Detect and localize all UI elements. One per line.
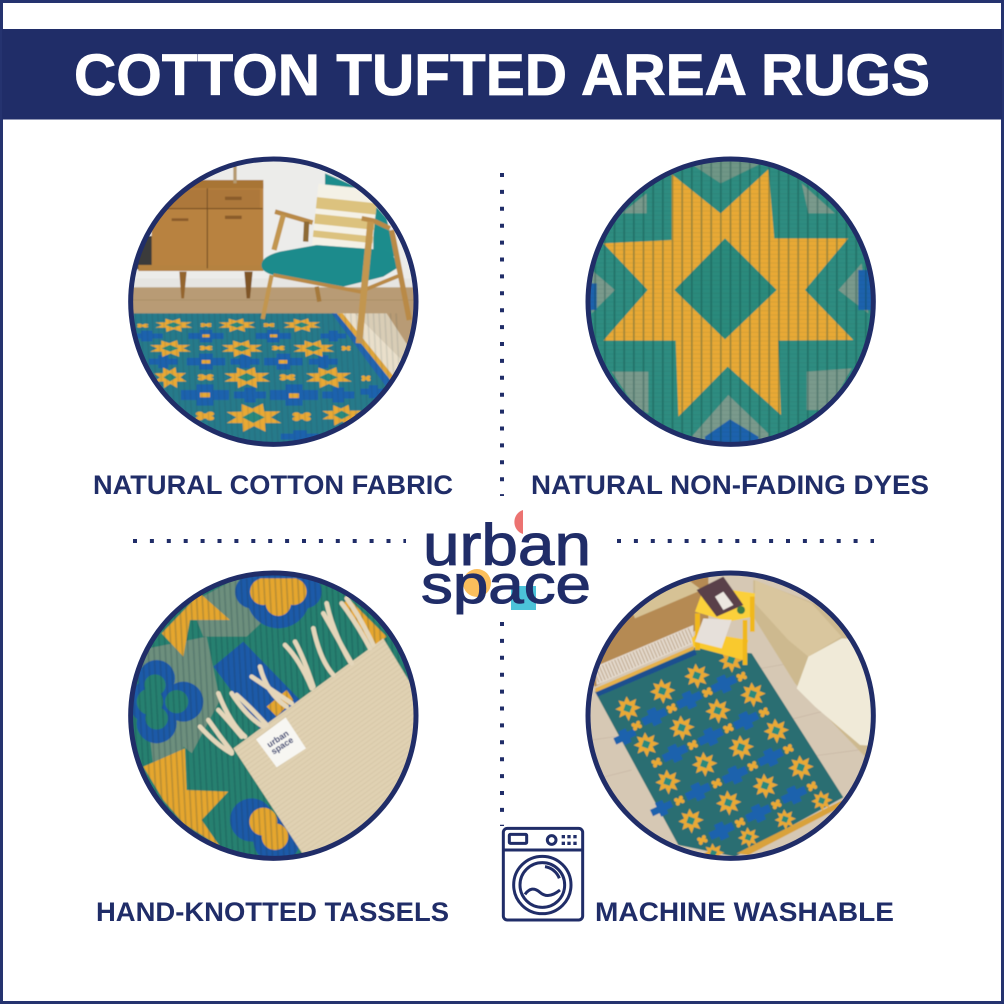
sofa	[753, 580, 868, 756]
logo shape: cyan square	[511, 586, 536, 610]
woven label: urban	[265, 728, 291, 750]
logo shape: yellow circle	[463, 569, 491, 597]
label: hand-knotted tassels: HAND-KNOTTED TASSELS	[96, 897, 449, 927]
rug floor area	[134, 312, 413, 442]
logo: urban space	[421, 510, 591, 615]
top quatrefoil	[234, 576, 322, 629]
woven label: space	[269, 735, 295, 756]
armchair	[261, 173, 409, 343]
rug from above	[595, 644, 844, 867]
photo circle: rug corner with tassels	[128, 570, 418, 861]
horizontal dotted divider, right	[617, 539, 874, 543]
vertical dotted divider, lower	[500, 622, 504, 826]
title: COTTON TUFTED AREA RUGS	[74, 43, 930, 108]
logo shape: coral half circle	[514, 510, 523, 534]
left quatrefoil	[128, 660, 203, 743]
photo circle: living room with rug	[128, 156, 418, 447]
woven label	[256, 717, 306, 767]
yellow side table	[692, 577, 755, 665]
logo wordmark: space: space	[421, 555, 591, 615]
bottom quatrefoil	[230, 798, 299, 856]
photo circle: rug on floor from above	[586, 570, 876, 861]
folded cream rug	[232, 638, 414, 853]
label: natural non-fading dyes: NATURAL NON-FADING DYES	[531, 470, 929, 500]
tassels	[200, 598, 373, 753]
label: natural cotton fabric: NATURAL COTTON FABRIC	[93, 470, 453, 500]
icon: washing machine	[503, 828, 583, 920]
vertical dotted divider, upper	[500, 173, 504, 496]
photo circle: star weave close-up	[586, 156, 876, 447]
label: machine washable: MACHINE WASHABLE	[595, 897, 894, 927]
throw blanket	[796, 638, 871, 746]
logo wordmark: urban: urban	[423, 513, 591, 578]
title banner	[2, 29, 1002, 120]
horizontal dotted divider, left	[133, 539, 406, 543]
